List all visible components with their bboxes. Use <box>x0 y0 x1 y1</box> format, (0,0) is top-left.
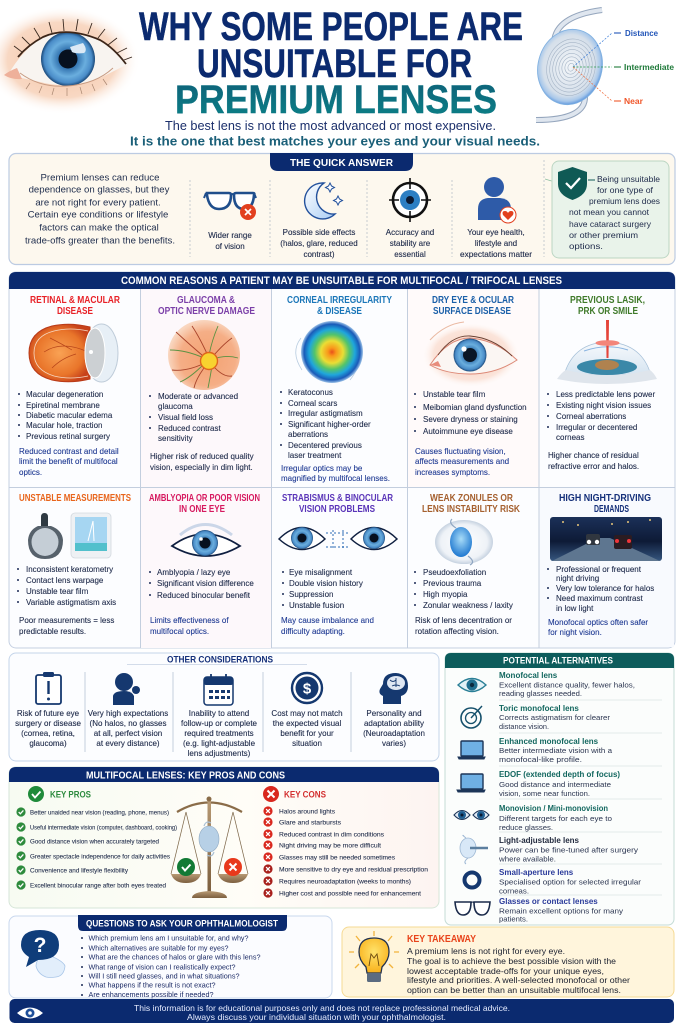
card: strabismus: Unstable fusion <box>289 601 344 610</box>
card: glaucoma: glaucoma <box>158 402 193 411</box>
callout: reassurance: not mean you cannot <box>569 207 650 217</box>
alternative: monofocal <box>458 671 635 698</box>
card: weak zonules: Zonular weakness / laxity <box>423 601 513 610</box>
list: key cons: KEY CONS <box>284 790 326 800</box>
list: questions: What are the chances of halos or glare with this lens? <box>88 952 260 962</box>
alternative: toric: Corrects astigmatism for clearer <box>499 713 611 722</box>
card: weak zonules: Previous trauma <box>423 579 482 588</box>
card: dry eye: Severe dryness or staining <box>423 415 518 424</box>
title: PREMIUM LENSES <box>175 78 497 122</box>
card: unstable measurements <box>18 492 131 636</box>
card: glaucoma <box>150 294 255 472</box>
card: glaucoma: GLAUCOMA & <box>177 294 235 306</box>
alternative: monovision: reduce glasses. <box>499 823 553 832</box>
card: night driving: for night vision. <box>548 628 602 637</box>
card: night driving: Very low tolerance for halos <box>556 584 654 593</box>
list: key cons <box>263 786 428 898</box>
label: wider range: Wider range <box>208 231 252 240</box>
image: dry red eye <box>421 322 521 388</box>
card: night driving: Professional or frequent <box>556 565 642 574</box>
list: key pros: Convenience and lifestyle flexibility <box>30 868 129 874</box>
icon: clipboard alert <box>36 672 61 704</box>
text: personality: (Neuroadaptation <box>363 729 425 738</box>
heading: other considerations: OTHER CONSIDERATIONS <box>167 654 273 666</box>
card: retinal and macular disease: Diabetic macular edema <box>26 411 113 420</box>
icon: dollar coin: $ <box>303 680 312 698</box>
text block: takeaway: option can be better than an unsuitable multifocal lens. <box>407 985 621 995</box>
alternative: small-aperture: Specialised option for selected irregular <box>499 878 642 886</box>
text: follow-up: (e.g. light-adjustable <box>183 739 256 748</box>
list: key cons: Night driving may be more difficult <box>279 842 381 850</box>
text block: takeaway: lowest acceptable trade-offs for your unique eyes, <box>407 966 604 976</box>
card: dry eye: affects measurements and <box>415 457 509 466</box>
icon: intraocular lens with focus labels <box>529 10 674 120</box>
card: retinal and macular disease: Macular degeneration <box>26 390 103 399</box>
text: high expectations <box>88 709 168 748</box>
label: side effects: contrast) <box>303 250 335 259</box>
text block: takeaway: lifestyle and priorities. A well-selected monofocal or other <box>407 975 630 985</box>
card: strabismus: STRABISMUS & BINOCULAR <box>282 492 393 504</box>
list: key pros <box>16 786 177 890</box>
card: previous lasik: corneas <box>556 433 584 442</box>
card: corneal irregularity: CORNEAL IRREGULARITY <box>287 294 392 306</box>
card: amblyopia: Limits effectiveness of <box>150 616 229 625</box>
icon: large blue eye <box>0 6 140 114</box>
alternative: enhanced monofocal <box>458 737 613 764</box>
card: retinal and macular disease: optics. <box>19 468 42 477</box>
text block: summary <box>25 172 175 246</box>
list: key pros: Good distance vision when accurately targeted <box>30 838 159 846</box>
card: amblyopia: Reduced binocular benefit <box>157 591 251 600</box>
card: strabismus: VISION PROBLEMS <box>299 503 375 515</box>
text: cost: situation <box>292 739 322 748</box>
card: retinal and macular disease: limit the benefit of multifocal <box>19 457 118 466</box>
text block: summary: Certain eye conditions or lifestyle <box>28 210 168 220</box>
text block: summary: dependence on glasses, but they <box>29 184 170 196</box>
card: night driving: night driving <box>556 574 599 583</box>
icon: glasses with cross <box>204 193 256 220</box>
icon: balance scale with lens <box>171 796 248 898</box>
alternative: enhanced monofocal: Better intermediate vision with a <box>499 746 613 755</box>
list: questions: Which premium lens am I unsuitable for, and why? <box>88 934 248 942</box>
icon: person with raised hand <box>113 673 140 705</box>
text block: takeaway: The goal is to achieve the best possible vision with the <box>407 956 616 966</box>
image: corneal topography map <box>296 321 363 383</box>
label: accuracy: essential <box>394 250 426 259</box>
card: weak zonules <box>415 492 520 636</box>
alternative: glasses or contacts: Glasses or contact lenses <box>499 897 598 906</box>
text: future surgery <box>15 709 81 748</box>
card: dry eye: Autoimmune eye disease <box>423 427 513 436</box>
icon: question speech bubbles: ? <box>34 934 46 957</box>
card: corneal irregularity: Decentered previous <box>288 441 362 450</box>
alternative: monofocal: Excellent distance quality, fewer halos, <box>499 680 635 690</box>
callout: reassurance: premium lens does <box>589 196 660 206</box>
text: personality: varies) <box>382 739 406 748</box>
list: key cons: Higher cost and possible need for enhancement <box>279 890 421 898</box>
card: glaucoma: OPTIC NERVE DAMAGE <box>158 305 255 317</box>
card: unstable measurements: Inconsistent keratometry <box>26 565 113 574</box>
card: unstable measurements: Contact lens warpage <box>26 576 104 585</box>
card: retinal and macular disease: DISEASE <box>57 305 93 317</box>
text: personality <box>363 709 425 748</box>
card: weak zonules: Pseudoexfoliation <box>423 568 486 577</box>
heading: common reasons <box>9 272 675 289</box>
card: previous lasik: Irregular or decentered <box>556 423 637 432</box>
card: unstable measurements: Unstable tear film <box>26 587 89 596</box>
label: eye health: Your eye health, <box>467 228 525 237</box>
text: personality: adaptation ability <box>364 719 424 728</box>
heading: questions <box>78 915 287 931</box>
alternative: toric: distance vision. <box>499 722 549 731</box>
text: follow-up: required treatments <box>184 729 254 738</box>
alternative: small-aperture: corneas. <box>499 886 529 896</box>
image: night road with cars <box>550 517 662 561</box>
text: high expectations: at all, perfect vision <box>94 729 162 738</box>
card: amblyopia: Significant vision difference <box>157 579 254 588</box>
alternative: edof: vision, some near function. <box>499 789 590 798</box>
list: questions: Are enhancements possible if needed? <box>88 990 214 999</box>
text block: summary: Premium lenses can reduce <box>41 172 159 184</box>
alternative: light-adjustable: Power can be fine-tuned after surgery <box>499 846 638 854</box>
list: questions: Will I still need glasses, and in what situations? <box>88 972 240 980</box>
footer disclaimer: This information is for educational purposes only and does not replace professional medical advice. <box>134 1003 510 1013</box>
text: cost: Cost may not match <box>271 709 343 718</box>
icon: dollar coin <box>292 673 322 703</box>
card: glaucoma: Higher risk of reduced quality <box>150 452 254 461</box>
alternative: edof: Good distance and intermediate <box>499 780 611 789</box>
list: key pros: KEY PROS <box>50 790 91 800</box>
card: corneal irregularity: aberrations <box>288 430 328 439</box>
card: weak zonules: Risk of lens decentration or <box>415 616 512 625</box>
text block: summary: trade-offs greater than the benefits. <box>25 236 175 246</box>
alternative: enhanced monofocal: Enhanced monofocal lens <box>499 737 599 746</box>
label: side effects <box>280 228 358 259</box>
card: previous lasik <box>548 294 657 471</box>
alternative: enhanced monofocal: monofocal-like profile. <box>499 755 582 764</box>
subtitle: It is the one that best matches your eyes and your visual needs. <box>130 134 540 148</box>
text: follow-up: follow-up or complete <box>181 719 258 728</box>
title: WHY SOME PEOPLE ARE <box>139 5 523 49</box>
card: dry eye: SURFACE DISEASE <box>433 305 511 317</box>
alternative: light-adjustable <box>460 835 638 864</box>
label: accuracy <box>386 228 434 259</box>
panel: common reasons <box>9 272 675 648</box>
label: eye health: lifestyle and <box>475 239 517 248</box>
list: key pros: Better unaided near vision (reading, phone, menus) <box>30 810 169 816</box>
card: strabismus: Double vision history <box>289 579 363 588</box>
card: night driving: HIGH NIGHT-DRIVING <box>559 492 651 504</box>
text: cost: benefit for your <box>280 729 334 738</box>
card: unstable measurements: Poor measurements = less <box>19 616 114 625</box>
title: UNSUITABLE FOR <box>197 42 472 86</box>
label: side effects: (halos, glare, reduced <box>280 239 358 248</box>
footer disclaimer <box>10 999 674 1023</box>
image: blue eye <box>172 524 240 556</box>
image: laser on cornea <box>557 320 657 384</box>
card: dry eye <box>415 294 527 477</box>
card: corneal irregularity <box>281 294 392 483</box>
icon: person with heart <box>478 177 516 223</box>
image: keratometer and tablet <box>28 513 111 559</box>
text: follow-up <box>181 709 258 758</box>
card: weak zonules: LENS INSTABILITY RISK <box>422 503 520 515</box>
callout: reassurance: for one type of <box>597 185 654 195</box>
card: strabismus: difficulty adapting. <box>281 627 345 636</box>
label: side effects: Possible side effects <box>283 228 355 237</box>
card: strabismus: Eye misalignment <box>289 568 353 577</box>
card: previous lasik: PRK OR SMILE <box>578 305 638 317</box>
heading: pros and cons: MULTIFOCAL LENSES: KEY PROS AND CONS <box>86 770 285 782</box>
heading: potential alternatives: POTENTIAL ALTERNATIVES <box>503 656 613 666</box>
callout: reassurance: or other premium <box>569 230 638 240</box>
alternative: glasses or contacts: Remain excellent options for many <box>499 906 623 916</box>
alternative: light-adjustable: where available. <box>498 854 556 864</box>
list: key pros: Excellent binocular range after both eyes treated <box>30 882 166 890</box>
image: misaligned eyes <box>279 527 397 550</box>
card: corneal irregularity: magnified by multifocal lenses. <box>281 474 390 483</box>
icon: head with brain <box>379 673 408 704</box>
card: strabismus <box>279 492 397 636</box>
callout: reassurance <box>552 161 669 258</box>
label: accuracy: Accuracy and <box>386 228 434 237</box>
card: previous lasik: Less predictable lens power <box>556 390 656 399</box>
card: dry eye: DRY EYE & OCULAR <box>432 294 514 306</box>
alternative: monovision: Different targets for each eye to <box>499 814 612 823</box>
image: lens in capsule <box>435 519 493 565</box>
card: corneal irregularity: Irregular astigmatism <box>288 409 363 418</box>
image: retina cross-section <box>29 324 118 382</box>
text: follow-up: Inability to attend <box>189 709 249 718</box>
list: key cons: Glasses may still be needed sometimes <box>279 854 396 862</box>
panel: potential alternatives <box>445 653 674 925</box>
text: personality: Personality and <box>366 709 422 718</box>
card: night driving: Need maximum contrast <box>556 594 643 603</box>
icon: light bulb <box>349 931 399 982</box>
label: wider range: of vision <box>215 242 245 251</box>
card: glaucoma: Reduced contrast <box>158 424 221 433</box>
icon: crescent moon and stars <box>305 183 342 219</box>
panel: questions to ask <box>9 915 332 999</box>
card: glaucoma: Visual field loss <box>158 413 213 422</box>
alternative: glasses or contacts <box>455 897 623 924</box>
card: glaucoma: vision, especially in dim light. <box>150 463 253 472</box>
card: dry eye: increases symptoms. <box>415 468 490 477</box>
card: previous lasik: refractive error and halos. <box>548 462 639 471</box>
text: follow-up: lens adjustments) <box>188 749 251 758</box>
text: future surgery: (cornea, retina, <box>21 729 75 738</box>
callout: reassurance: options. <box>569 241 603 251</box>
callout: reassurance: have cataract surgery <box>569 219 652 229</box>
list: key cons: Glare and starbursts <box>279 820 342 826</box>
alternative: monofocal: Monofocal lens <box>499 671 558 680</box>
heading: questions: QUESTIONS TO ASK YOUR OPHTHALMOLOGIST <box>86 918 278 930</box>
text block: summary: are not right for every patient. <box>35 198 161 208</box>
panel: multifocal pros and cons <box>9 767 439 908</box>
card: previous lasik: Corneal aberrations <box>556 412 626 421</box>
panel: key takeaway <box>342 927 674 997</box>
icon: shield check <box>558 167 587 200</box>
card: night driving <box>548 492 662 637</box>
subtitle: The best lens is not the most advanced or most expensive. <box>165 119 496 133</box>
card: corneal irregularity: Significant higher-order <box>288 420 371 429</box>
card: retinal and macular disease: Macular hole, traction <box>26 421 102 430</box>
card: night driving: DEMANDS <box>594 503 629 515</box>
list: key cons: Requires neuroadaptation (weeks to months) <box>279 878 411 886</box>
alternative: edof: EDOF (extended depth of focus) <box>499 770 620 779</box>
card: dry eye: Meibomian gland dysfunction <box>423 403 527 412</box>
card: previous lasik: PREVIOUS LASIK, <box>570 294 645 306</box>
list: key cons: Halos around lights <box>279 808 336 816</box>
alternative: light-adjustable: Light-adjustable lens <box>499 836 580 845</box>
alternative: toric <box>461 704 611 731</box>
list: questions: What happens if the result is not exact? <box>88 980 216 990</box>
text: future surgery: surgery or disease <box>15 719 81 728</box>
label: accuracy: stability are <box>390 239 431 248</box>
card: previous lasik: Existing night vision issues <box>556 401 651 410</box>
list: questions: What range of vision can I realistically expect? <box>88 962 236 972</box>
card: corneal irregularity: & DISEASE <box>317 305 362 317</box>
card: weak zonules: WEAK ZONULES OR <box>430 492 513 504</box>
list: questions <box>82 934 260 999</box>
subtitle <box>130 119 540 148</box>
alternative: monofocal: reading glasses needed. <box>499 689 582 698</box>
text: cost <box>271 709 343 748</box>
card: unstable measurements: UNSTABLE MEASUREMENTS <box>19 492 131 504</box>
alternative: small-aperture: Small-aperture lens <box>499 868 574 877</box>
card: corneal irregularity: Corneal scars <box>288 399 337 408</box>
card: unstable measurements: Variable astigmatism axis <box>26 598 116 607</box>
list: key pros: Greater spectacle independence for daily activities <box>30 854 171 860</box>
label: eye health: expectations matter <box>460 250 532 259</box>
card: retinal and macular disease: Reduced contrast and detail <box>19 447 119 456</box>
alternative: small-aperture <box>464 868 642 896</box>
footer disclaimer: Always discuss your individual situation with your ophthalmologist. <box>187 1012 446 1022</box>
text: high expectations: at every distance) <box>96 739 160 748</box>
panel: the quick answer <box>9 153 675 264</box>
alternative: monovision: Monovision / Mini-monovision <box>499 804 608 813</box>
card: amblyopia: AMBLYOPIA OR POOR VISION <box>149 492 260 504</box>
card: amblyopia <box>149 492 260 636</box>
card: retinal and macular disease: Epiretinal membrane <box>26 401 100 410</box>
card: amblyopia: Amblyopia / lazy eye <box>157 568 231 577</box>
card: glaucoma: Moderate or advanced <box>158 392 238 401</box>
label: eye health <box>460 228 532 259</box>
text: future surgery: glaucoma) <box>29 739 67 748</box>
icon: calendar <box>204 674 233 705</box>
heading: common reasons: COMMON REASONS A PATIENT MAY BE UNSUITABLE FOR MULTIFOCAL / TRIFOCAL LENSES <box>121 275 562 287</box>
heading: potential alternatives <box>445 653 674 668</box>
text block: summary: factors can make the optical <box>39 222 159 234</box>
alternative: toric: Toric monofocal lens <box>499 704 579 713</box>
panel: key takeaway: KEY TAKEAWAY <box>407 934 476 945</box>
label: wider range <box>208 231 252 251</box>
card: retinal and macular disease: Previous retinal surgery <box>26 432 110 441</box>
card: weak zonules: High myopia <box>423 590 468 599</box>
text: high expectations: Very high expectations <box>88 709 168 718</box>
text: future surgery: Risk of future eye <box>17 709 80 718</box>
card: corneal irregularity: laser treatment <box>288 451 342 460</box>
card: strabismus: May cause imbalance and <box>281 616 374 625</box>
title <box>139 5 523 122</box>
icon: intraocular lens with focus labels: Distance <box>625 28 658 38</box>
card: corneal irregularity: Irregular optics may be <box>281 464 363 473</box>
card: corneal irregularity: Keratoconus <box>288 388 333 397</box>
list: key cons: More sensitive to dry eye and residual prescription <box>279 866 428 874</box>
card: retinal and macular disease <box>19 294 120 477</box>
alternative: edof <box>457 770 620 798</box>
image: optic nerve fundus <box>168 320 240 390</box>
card: glaucoma: sensitivity <box>158 434 193 443</box>
alternative: monovision <box>454 804 612 832</box>
card: amblyopia: multifocal optics. <box>150 627 209 636</box>
icon: intraocular lens with focus labels: Intermediate <box>624 62 674 72</box>
alternative: glasses or contacts: patients. <box>499 914 528 924</box>
text block: takeaway: A premium lens is not right for every eye. <box>407 946 565 956</box>
list: questions: Which alternatives are suitable for my eyes? <box>88 944 228 952</box>
card: unstable measurements: predictable results. <box>19 627 86 636</box>
icon: target eye <box>389 178 431 222</box>
heading: the quick answer: THE QUICK ANSWER <box>290 157 393 169</box>
text: high expectations: (No halos, no glasses <box>90 719 166 728</box>
text: cost: the expected visual <box>273 719 341 728</box>
icon: question speech bubbles <box>21 930 65 978</box>
card: dry eye: Causes fluctuating vision, <box>415 447 506 456</box>
card: night driving: in low light <box>556 604 594 613</box>
list: key pros: Useful intermediate vision (computer, dashboard, cooking) <box>30 824 177 832</box>
card: previous lasik: Higher chance of residual <box>548 451 639 460</box>
icon: footer eye <box>17 1008 43 1018</box>
text block: takeaway <box>407 946 630 995</box>
panel: other considerations <box>9 653 439 761</box>
card: retinal and macular disease: RETINAL & MACULAR <box>30 294 120 306</box>
icon: intraocular lens with focus labels: Near <box>624 96 644 106</box>
callout: reassurance: Being unsuitable <box>597 174 660 184</box>
heading: pros and cons <box>9 767 439 782</box>
list: key cons: Reduced contrast in dim conditions <box>279 832 385 838</box>
card: strabismus: Suppression <box>289 590 333 599</box>
heading: the quick answer <box>270 153 413 171</box>
card: amblyopia: IN ONE EYE <box>179 503 225 515</box>
card: night driving: Monofocal optics often safer <box>548 618 648 627</box>
card: dry eye: Unstable tear film <box>423 390 486 399</box>
card: weak zonules: rotation affecting vision. <box>415 627 499 636</box>
